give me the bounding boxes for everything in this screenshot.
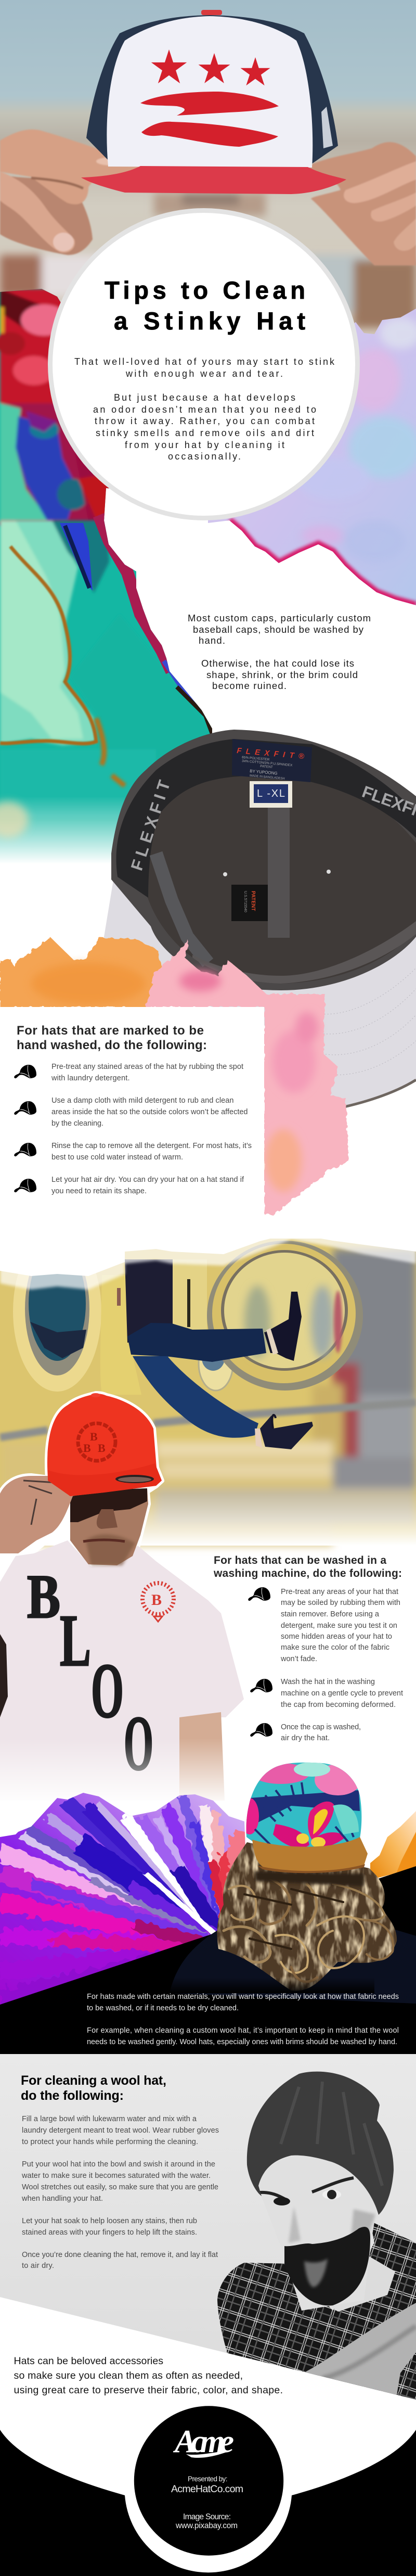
tee lettering: B bbox=[27, 1562, 60, 1631]
text: special materials note bbox=[87, 1993, 399, 2046]
text: special materials note: For example, when cleaning a custom wool hat, it’s important to keep in mind that the wool bbox=[87, 2026, 399, 2035]
red cap: B bbox=[83, 1442, 91, 1455]
sweatband label bbox=[232, 739, 312, 782]
sweatband label: MADE IN BANGLADESH bbox=[250, 774, 285, 781]
step 3 bbox=[51, 1142, 252, 1162]
title circle bbox=[48, 208, 360, 520]
shirt bbox=[0, 1540, 244, 1801]
eyes and brows bbox=[260, 2178, 354, 2205]
heading bbox=[17, 1024, 207, 1052]
heading: washing machine, do the following: bbox=[213, 1567, 402, 1579]
text: closing message: using great care to preserve their fabric, color, and shape. bbox=[14, 2384, 283, 2396]
middle washer door bbox=[199, 1336, 233, 1391]
step 2: when handling your hat. bbox=[21, 2195, 103, 2203]
hat crown and brim bbox=[81, 10, 346, 194]
tee lettering: L bbox=[60, 1599, 91, 1681]
heading: hand washed, do the following: bbox=[17, 1038, 207, 1052]
step 1: won’t fade. bbox=[280, 1655, 317, 1663]
step 2: by the cleaning. bbox=[51, 1119, 103, 1128]
text: closing message bbox=[14, 2355, 283, 2396]
patent tag bbox=[231, 885, 268, 921]
icon: cap 1 bbox=[14, 1065, 36, 1078]
credit: image source: Image Source: bbox=[183, 2513, 231, 2521]
credit: presented by: Presented by: bbox=[188, 2475, 228, 2483]
text: special materials note: needs to be washed gently. Wool hats, especially ones with brims should be washed by hand. bbox=[87, 2038, 397, 2046]
step 1 bbox=[22, 2115, 219, 2146]
step 3 bbox=[22, 2217, 197, 2237]
photo: bearded man in beanie bbox=[217, 2072, 416, 2404]
footer bbox=[0, 2406, 416, 2576]
arm bbox=[305, 2303, 416, 2404]
step 1 bbox=[280, 1588, 400, 1663]
step 2 bbox=[21, 2160, 218, 2203]
step 3: Rinse the cap to remove all the detergent. For most hats, it’s bbox=[51, 1142, 252, 1150]
red cap: B bbox=[98, 1442, 106, 1455]
face bbox=[292, 2221, 374, 2311]
panel: hand washing steps bbox=[0, 1007, 264, 1213]
step 4: Once you’re done cleaning the hat, remove it, and lay it flat bbox=[22, 2251, 218, 2259]
step 3: Let your hat soak to help loosen any stains, then rub bbox=[22, 2217, 197, 2225]
title bbox=[105, 276, 305, 335]
decoration: colour burst bbox=[0, 1790, 416, 2009]
panel: black band bbox=[0, 1866, 416, 2054]
credit: presented by bbox=[171, 2475, 243, 2495]
step 2: Put your wool hat into the bowl and swish it around in the bbox=[22, 2160, 215, 2169]
intro text: That well-loved hat of yours may start to stink bbox=[74, 356, 335, 367]
title: a Stinky Hat bbox=[114, 307, 305, 335]
icon: cap 3 bbox=[14, 1143, 36, 1156]
patent tag: U.S.5715540 bbox=[243, 891, 247, 912]
tee lettering: O bbox=[91, 1648, 124, 1734]
hat crown bbox=[246, 1762, 362, 1847]
photo: underside of cap bbox=[104, 730, 416, 1110]
footer circle bbox=[134, 2406, 283, 2556]
panel: machine washing steps bbox=[213, 1554, 403, 1742]
beanie bbox=[247, 2072, 394, 2215]
step 3: air dry the hat. bbox=[281, 1734, 330, 1742]
logo: Acme: Acme bbox=[173, 2424, 234, 2459]
step 2: machine on a gentle cycle to prevent bbox=[281, 1689, 403, 1698]
red cap: B bbox=[90, 1430, 98, 1443]
hat brim bbox=[252, 1837, 368, 1872]
step 1: Pre-treat any areas of your hat that bbox=[281, 1588, 398, 1596]
intro text: with enough wear and tear. bbox=[125, 368, 283, 379]
step 3: Once the cap is washed, bbox=[281, 1723, 361, 1731]
text: special materials note: For hats made with certain materials, you will want to specifically look at how that fabric needs bbox=[87, 1993, 399, 2001]
heading: For hats that can be washed in a bbox=[214, 1554, 386, 1566]
text: wash by hand note: Otherwise, the hat could lose its bbox=[201, 658, 354, 669]
icon: cap 1 bbox=[248, 1587, 270, 1601]
credit: presented by: AcmeHatCo.com bbox=[171, 2483, 243, 2495]
photo: hands holding hat bbox=[0, 0, 416, 343]
step 1: Fill a large bowl with lukewarm water and mix with a bbox=[22, 2115, 197, 2123]
decoration: red and teal ink bbox=[0, 286, 218, 879]
heading: For cleaning a wool hat, bbox=[21, 2073, 166, 2088]
intro text: stinky smells and remove oils and dirt bbox=[96, 428, 314, 438]
tee crest: B bbox=[151, 1591, 162, 1609]
text: closing message: so make sure you clean them as often as needed, bbox=[14, 2370, 243, 2381]
step 2: Wash the hat in the washing bbox=[281, 1678, 375, 1686]
sweatband label: PATENT bbox=[260, 764, 273, 769]
sweatband label: 65% POLYESTER bbox=[242, 756, 270, 762]
sweatband label: BY YUPOONG bbox=[250, 769, 278, 776]
left washer door bbox=[13, 1231, 141, 1395]
photo: man in red cap and BLOOD tee: O bbox=[124, 1700, 153, 1787]
step 1: Pre-treat any stained areas of the hat by rubbing the spot bbox=[51, 1063, 243, 1071]
step 4: you need to retain its shape. bbox=[51, 1187, 147, 1195]
white sticker outline bbox=[0, 1394, 162, 1572]
intro text: occasionally. bbox=[168, 451, 241, 462]
step 2: the cap from becoming deformed. bbox=[281, 1701, 396, 1709]
step 3: best to use cold water instead of warm. bbox=[51, 1153, 183, 1162]
intro text: an odor doesn’t mean that you need to bbox=[93, 404, 316, 415]
decoration: purple ink bbox=[208, 307, 416, 609]
icon: cap 2 bbox=[250, 1679, 272, 1692]
arm bbox=[179, 1712, 225, 1801]
tee lettering bbox=[27, 1562, 153, 1787]
heading bbox=[21, 2073, 166, 2103]
step 1: may be soiled by rubbing them with bbox=[281, 1599, 400, 1607]
icon: cap 3 bbox=[250, 1723, 272, 1737]
band lettering: FLEXFIT bbox=[127, 777, 174, 873]
icon: cap 2 bbox=[14, 1101, 36, 1115]
step 2: Use a damp cloth with mild detergent to rub and clean bbox=[51, 1096, 234, 1105]
size tag: L -XL bbox=[257, 788, 285, 799]
step 2: areas inside the hat so the outside colors won’t be affected bbox=[51, 1108, 248, 1116]
orange burst bbox=[370, 1811, 416, 1880]
left hand bbox=[0, 130, 139, 255]
heading: do the following: bbox=[21, 2088, 124, 2103]
photo: man in red cap and BLOOD tee bbox=[0, 1393, 244, 1806]
step 1: make sure the color of the fabric bbox=[281, 1643, 389, 1652]
step 1: to protect your hands while performing the cleaning. bbox=[22, 2138, 198, 2146]
intro text: from your hat by cleaning it bbox=[125, 440, 284, 450]
credit: image source bbox=[175, 2513, 238, 2530]
fade edges bbox=[0, 1228, 416, 1276]
step 3: stained areas with your fingers to help lift the stains. bbox=[22, 2228, 197, 2237]
sweatband label: FLEXFIT® bbox=[237, 746, 305, 761]
text: wash by hand note bbox=[188, 613, 371, 691]
hand bbox=[0, 1476, 93, 1553]
sweatband label: 34% COTTON/3% P.U.SPANDEX bbox=[242, 759, 293, 768]
step 1: some hidden areas of your hat to bbox=[281, 1633, 392, 1641]
large washer door bbox=[207, 1241, 363, 1391]
text: special materials note: to be washed, or if it needs to be dry cleaned. bbox=[87, 2004, 239, 2012]
hair bbox=[217, 1842, 397, 1991]
text: wash by hand note: Most custom caps, particularly custom bbox=[188, 613, 371, 623]
decoration: orange and pink watercolour bbox=[0, 937, 348, 1215]
size tag bbox=[250, 781, 292, 808]
text: closing message: Hats can be beloved accessories bbox=[14, 2355, 163, 2367]
panel: wool hat steps bbox=[0, 2054, 416, 2404]
step 2 bbox=[281, 1678, 403, 1709]
step 3 bbox=[281, 1723, 361, 1742]
tee crest bbox=[142, 1583, 174, 1622]
icon: cap 4 bbox=[14, 1179, 36, 1192]
step 1 bbox=[51, 1063, 243, 1082]
step 1: with laundry detergent. bbox=[51, 1074, 130, 1082]
hat stars and stripes bbox=[140, 49, 279, 147]
text: wash by hand note: hand. bbox=[199, 635, 225, 646]
photo: laundromat bbox=[0, 1228, 416, 1546]
right hand bbox=[308, 142, 416, 265]
heading: For hats that are marked to be bbox=[17, 1024, 204, 1038]
jacket bbox=[170, 1928, 416, 2004]
heading bbox=[213, 1554, 402, 1579]
red cap bbox=[47, 1393, 162, 1496]
step 2: Wool stretches out easily, so make sure that you are gentle bbox=[22, 2183, 218, 2191]
rail bbox=[0, 1402, 416, 1437]
step 2 bbox=[51, 1096, 248, 1128]
step 4: Let your hat air dry. You can dry your hat on a hat stand if bbox=[51, 1176, 244, 1184]
step 4 bbox=[22, 2251, 218, 2270]
step 4: to air dry. bbox=[22, 2262, 54, 2270]
intro text bbox=[74, 356, 335, 462]
title: Tips to Clean bbox=[105, 276, 305, 304]
step 4 bbox=[51, 1176, 244, 1195]
credit: image source: www.pixabay.com bbox=[175, 2521, 238, 2530]
step 2: water to make sure it becomes saturated with the water. bbox=[21, 2172, 211, 2180]
text: wash by hand note: become ruined. bbox=[212, 680, 287, 691]
intro text: throw it away. Rather, you can combat bbox=[95, 416, 315, 426]
photo: floral hat and curly hair bbox=[156, 1759, 416, 2004]
step 1: laundry detergent meant to treat wool. Wear rubber gloves bbox=[22, 2126, 219, 2135]
step 1: detergent, make sure you test it on bbox=[281, 1622, 397, 1630]
dark machine opening bbox=[125, 1259, 173, 1343]
patent tag: PATENT bbox=[250, 891, 256, 911]
plaid shirt bbox=[217, 2221, 416, 2404]
step 1: stain remover. Before using a bbox=[281, 1610, 380, 1618]
intro text: But just because a hat develops bbox=[114, 392, 295, 403]
legs and shoes bbox=[127, 1292, 313, 1449]
beard bbox=[284, 2227, 370, 2305]
text: wash by hand note: shape, shrink, or the brim could bbox=[206, 669, 358, 680]
text: wash by hand note: baseball caps, should be washed by bbox=[193, 624, 364, 635]
face bbox=[70, 1488, 148, 1565]
